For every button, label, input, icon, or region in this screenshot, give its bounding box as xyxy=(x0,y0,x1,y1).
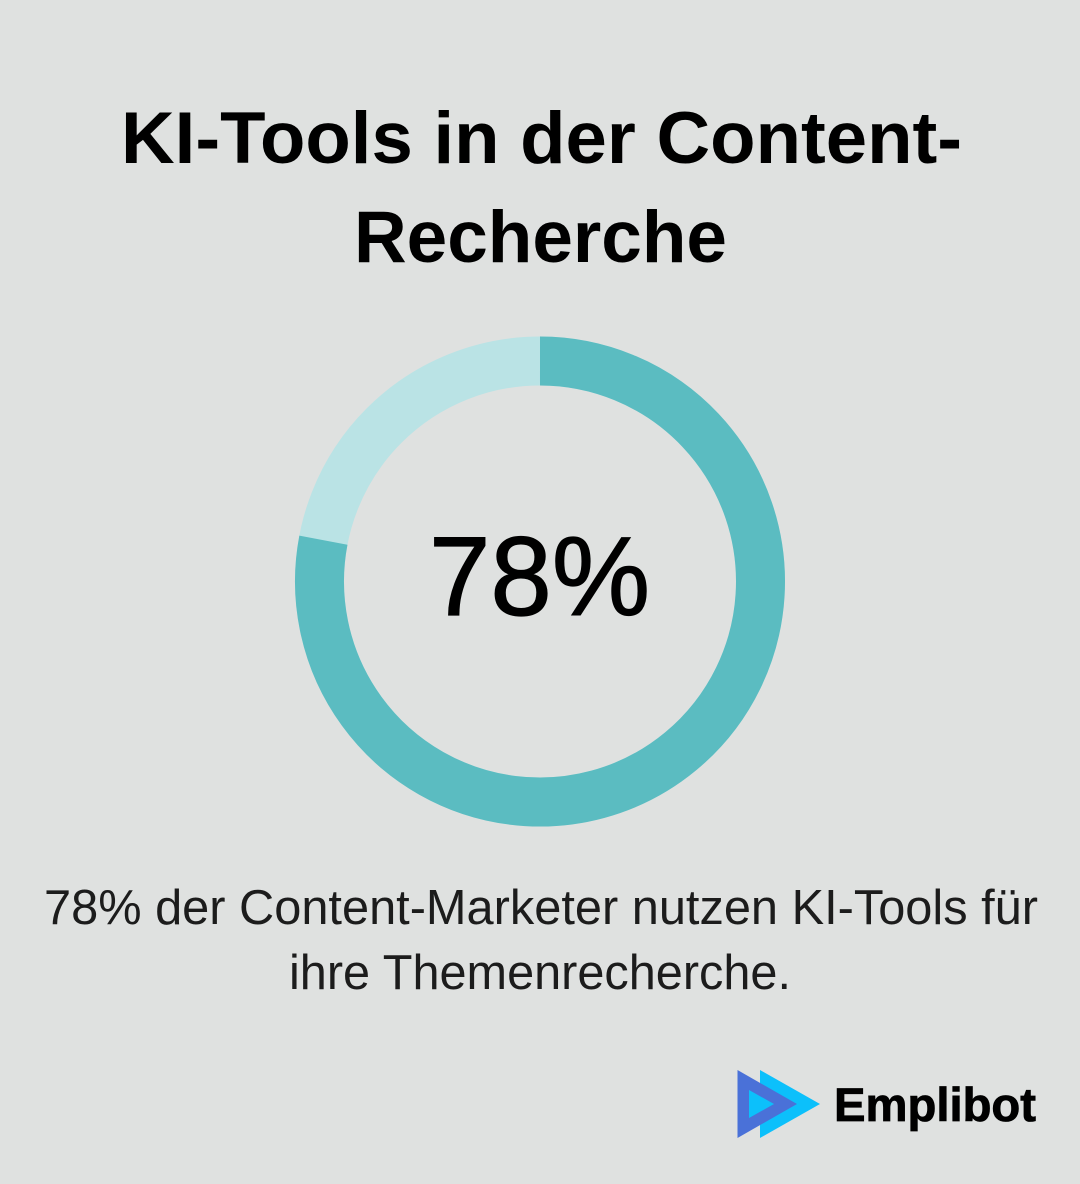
title: KI-Tools in der Content- xyxy=(121,98,962,179)
icon: play triangles xyxy=(738,1070,820,1138)
title: Recherche xyxy=(354,197,727,278)
title xyxy=(121,98,962,278)
logo wordmark: Emplibot xyxy=(834,1078,1036,1131)
description text xyxy=(44,881,1038,1000)
description text: ihre Themenrecherche. xyxy=(289,946,791,1000)
donut centre value: 78% xyxy=(429,514,650,639)
description text: 78% der Content-Marketer nutzen KI-Tools für xyxy=(44,881,1038,935)
donut chart: 78 percent xyxy=(319,361,760,802)
logo: Emplibot xyxy=(738,1070,1036,1138)
